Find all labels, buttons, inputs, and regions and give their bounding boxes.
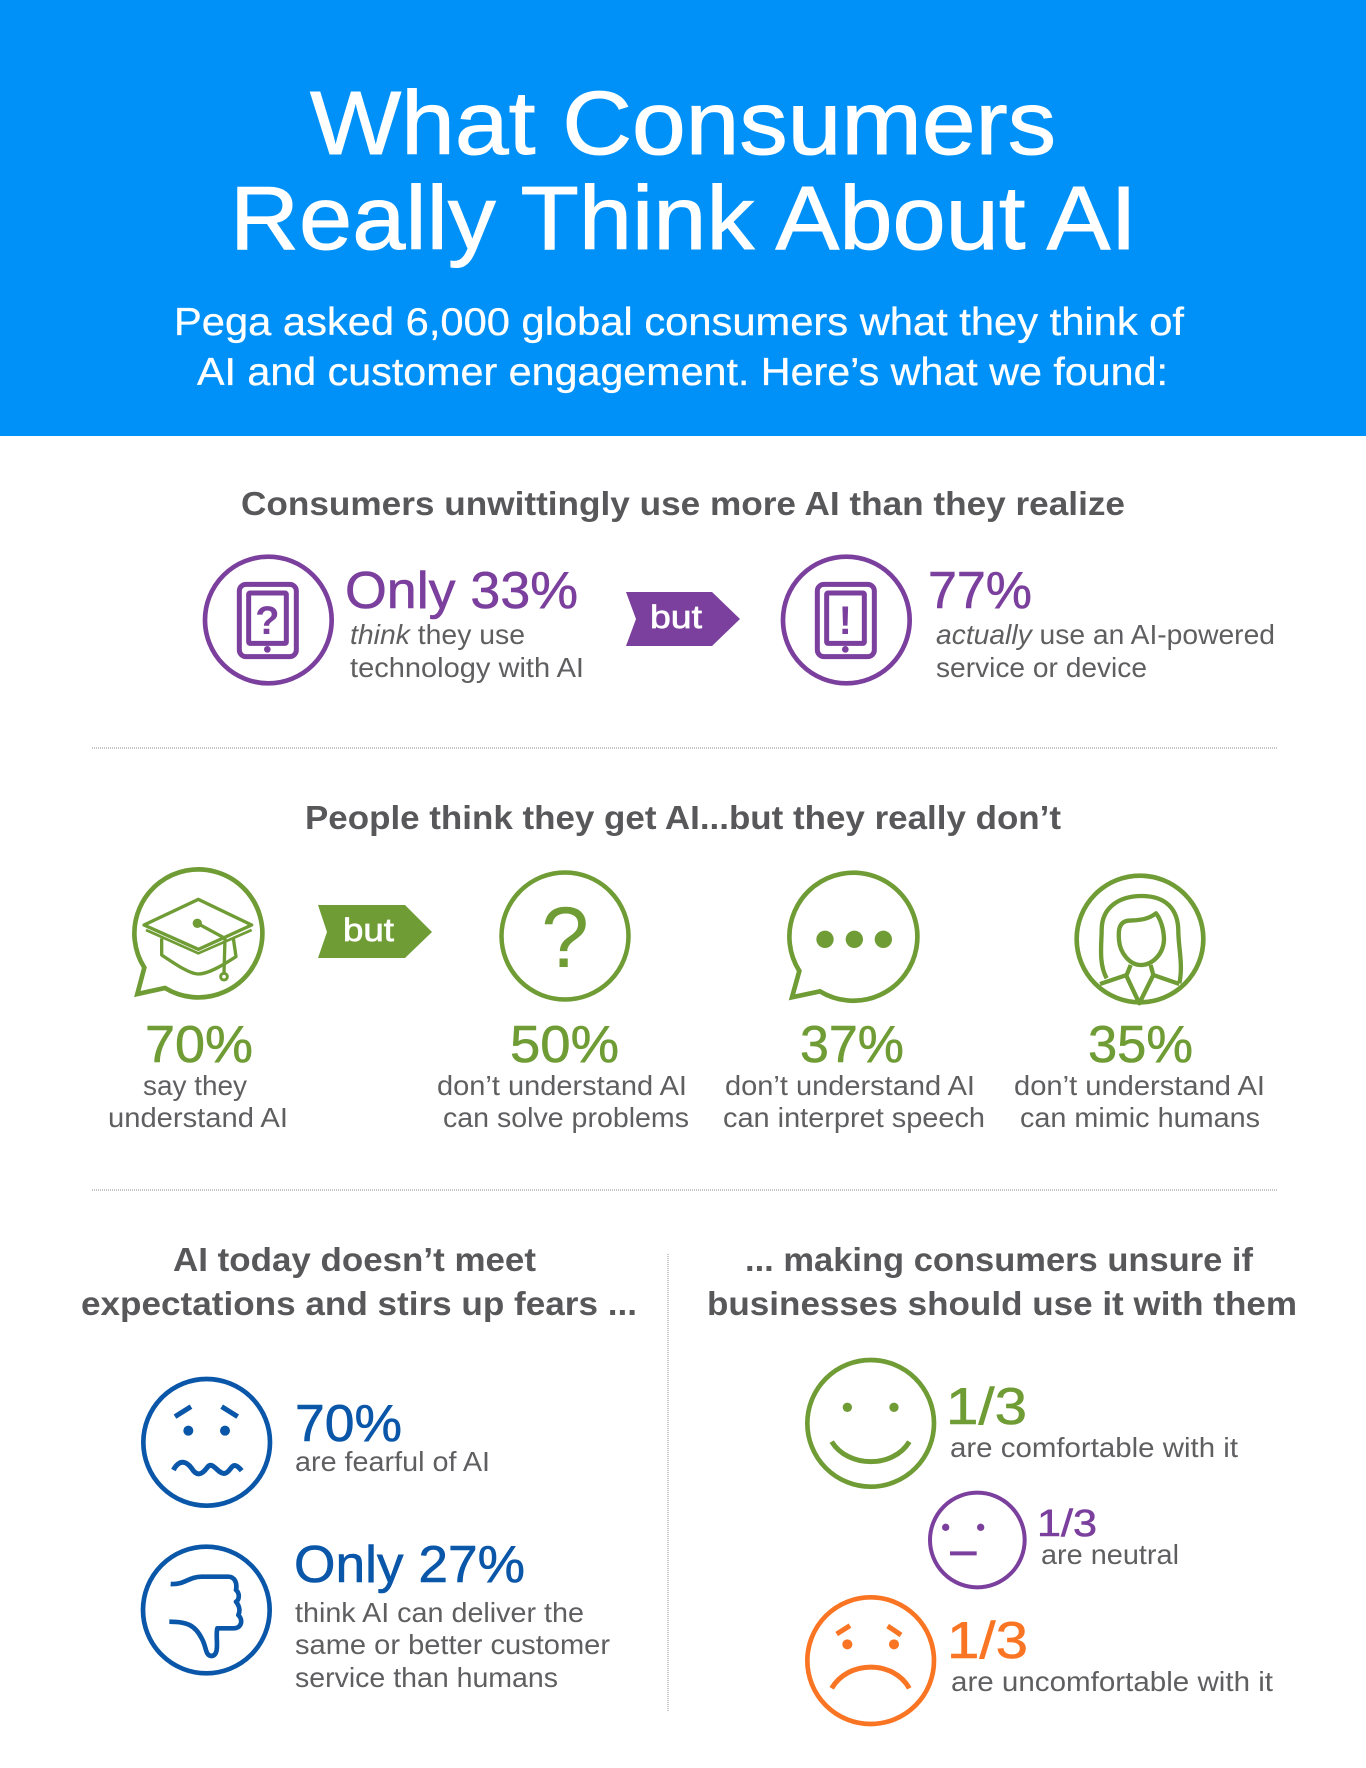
stat: 35%: 35% [1088, 1016, 1193, 1074]
icon: question mark circle: ? [541, 890, 589, 986]
stat: 50% [437, 1016, 689, 1133]
arrow: but: but [343, 912, 394, 948]
heading: AI today doesn’t meet [173, 1241, 536, 1278]
stat: only 33%: Only 33% [345, 562, 578, 620]
icon: smiling face [807, 1360, 934, 1487]
panel: unwitting AI use [205, 485, 1275, 683]
stat: 70% fearful: are fearful of AI [295, 1446, 490, 1477]
panel: unsure consumers [707, 1241, 1297, 1724]
title [230, 74, 1137, 269]
arrow: but: but [650, 599, 702, 635]
stat: only 27%: think AI can deliver the [295, 1597, 584, 1628]
panel: people think they get AI [108, 799, 1265, 1133]
stat: 70% understand: 70% [145, 1016, 253, 1074]
stat: comfortable [946, 1378, 1238, 1463]
stat: 70% understand: say they [143, 1070, 247, 1101]
title: What Consumers [310, 74, 1056, 174]
stat: 50%: 50% [510, 1016, 619, 1074]
text: think they use technology with AI: think they use [350, 619, 525, 650]
text: actually use an AI-powered service or device: service or device [936, 652, 1147, 683]
icon: tablet with question mark: ? [255, 599, 280, 643]
stat: comfortable: are comfortable with it [950, 1432, 1238, 1463]
icon: fearful face [143, 1379, 270, 1506]
text: think they use technology with AI: technology with AI [350, 652, 584, 683]
stat: 77%: 77% [928, 562, 1032, 620]
header banner [0, 0, 1366, 436]
heading: expectations and stirs up fears ... [81, 1285, 637, 1322]
heading: ... making consumers unsure if [745, 1241, 1254, 1278]
stat: 70% understand [108, 1016, 288, 1133]
stat: only 27%: Only 27% [294, 1536, 525, 1594]
stat: 70% fearful [295, 1395, 490, 1477]
icon: tablet with exclamation mark [783, 557, 910, 683]
subtitle: AI and customer engagement. Here’s what we found: [197, 351, 1168, 394]
title: Really Think About AI [230, 169, 1137, 269]
icon: tablet with exclamation mark: ! [839, 599, 852, 643]
stat: 35%: can mimic humans [1020, 1102, 1260, 1133]
stat: uncomfortable: are uncomfortable with it [951, 1666, 1273, 1697]
icon: neutral face [930, 1493, 1025, 1587]
subtitle [174, 301, 1184, 394]
stat: neutral [1037, 1503, 1179, 1570]
text: actually use an AI-powered service or device [936, 619, 1275, 683]
stat: 37%: 37% [800, 1016, 904, 1074]
stat: only 27%: same or better customer [295, 1629, 610, 1660]
stat: 50%: can solve problems [443, 1102, 689, 1133]
stat: uncomfortable [947, 1612, 1273, 1697]
text: actually use an AI-powered service or device: actually use an AI-powered [936, 619, 1275, 650]
stat: neutral: are neutral [1041, 1539, 1179, 1570]
subtitle: Pega asked 6,000 global consumers what they think of [174, 301, 1184, 344]
icon: human portrait [1077, 876, 1203, 1003]
stat: 50%: don’t understand AI [437, 1070, 687, 1101]
icon: speech bubble with dots [789, 873, 917, 1001]
icon: graduation cap speech bubble [134, 869, 262, 997]
stat: 70% understand: understand AI [108, 1102, 288, 1133]
icon: frowning face [807, 1597, 934, 1724]
icon: question mark circle [502, 872, 628, 1000]
heading: businesses should use it with them [707, 1285, 1297, 1322]
panel: fears [81, 1241, 637, 1693]
stat: 35% [1014, 1016, 1265, 1133]
stat: only 27%: service than humans [295, 1662, 558, 1693]
icon: tablet with question mark [205, 557, 332, 683]
heading: Consumers unwittingly use more AI than they realize [241, 485, 1125, 522]
arrow: but [626, 592, 740, 646]
heading: People think they get AI...but they really don’t [305, 799, 1061, 836]
stat: 35%: don’t understand AI [1014, 1070, 1265, 1101]
heading [81, 1241, 637, 1322]
heading [707, 1241, 1297, 1322]
stat: 37% [723, 1016, 985, 1133]
stat: 37%: can interpret speech [723, 1102, 985, 1133]
stat: comfortable: 1/3 [946, 1378, 1027, 1436]
stat: 70% fearful: 70% [295, 1395, 402, 1453]
stat: 37%: don’t understand AI [725, 1070, 975, 1101]
arrow: but [318, 905, 432, 958]
stat: neutral: 1/3 [1037, 1503, 1097, 1545]
stat: uncomfortable: 1/3 [947, 1612, 1028, 1670]
text: think they use technology with AI [350, 619, 584, 683]
icon: thumbs down [143, 1547, 270, 1673]
stat: only 27% [294, 1536, 610, 1693]
